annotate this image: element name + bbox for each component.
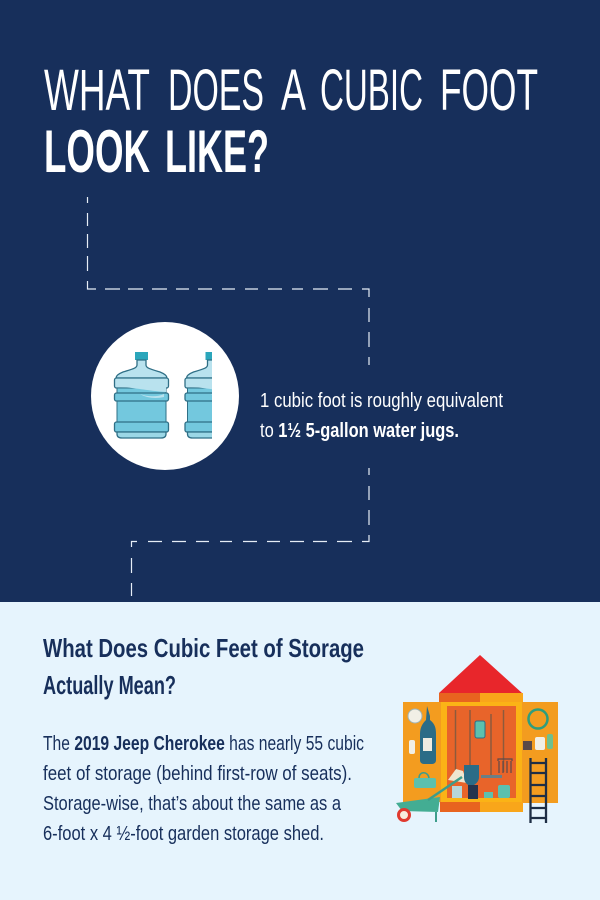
- ladder: [530, 758, 546, 823]
- icon: garden storage shed: [396, 655, 558, 823]
- text block: cubic foot equivalence: [260, 390, 503, 442]
- shed body and doors: [403, 693, 558, 812]
- icon: water jugs in white circle: [91, 322, 239, 470]
- text block: Jeep Cherokee comparison: feet of storage (behind first-row of seats).: [43, 763, 352, 785]
- text block: cubic foot equivalence: 1 cubic foot is roughly equivalent: [260, 390, 503, 412]
- heading: cubic feet of storage: Actually Mean?: [43, 670, 176, 700]
- title: DOES: [168, 58, 264, 123]
- background: navy panel: [0, 0, 600, 602]
- heading: cubic feet of storage: What Does Cubic Feet of Storage: [43, 633, 364, 663]
- text block: Jeep Cherokee comparison: [43, 733, 364, 845]
- text block: Jeep Cherokee comparison: The 2019 Jeep Cherokee has nearly 55 cubic: [43, 733, 364, 755]
- text block: cubic foot equivalence: to 1½ 5-gallon water jugs.: [260, 420, 459, 442]
- text block: Jeep Cherokee comparison: Storage-wise, that’s about the same as a: [43, 793, 342, 815]
- panel: lower light blue section: [0, 602, 600, 900]
- title: LIKE?: [165, 118, 269, 185]
- title: FOOT: [440, 58, 538, 123]
- title: LOOK: [44, 118, 150, 185]
- interior tools: [448, 710, 512, 799]
- shed roof: [439, 655, 522, 693]
- title: WHAT: [44, 58, 150, 123]
- dashed connector: jugs to lower panel: [132, 468, 369, 596]
- left door items: [408, 706, 436, 788]
- heading: cubic feet of storage: [43, 633, 364, 700]
- dashed connector: title to water jugs: [88, 197, 369, 365]
- title: A: [281, 58, 306, 123]
- title: [44, 58, 538, 185]
- wheelbarrow: [396, 777, 462, 822]
- right door items: [523, 710, 553, 750]
- text block: Jeep Cherokee comparison: 6-foot x 4 ½-foot garden storage shed.: [43, 823, 324, 845]
- title: CUBIC: [320, 58, 423, 123]
